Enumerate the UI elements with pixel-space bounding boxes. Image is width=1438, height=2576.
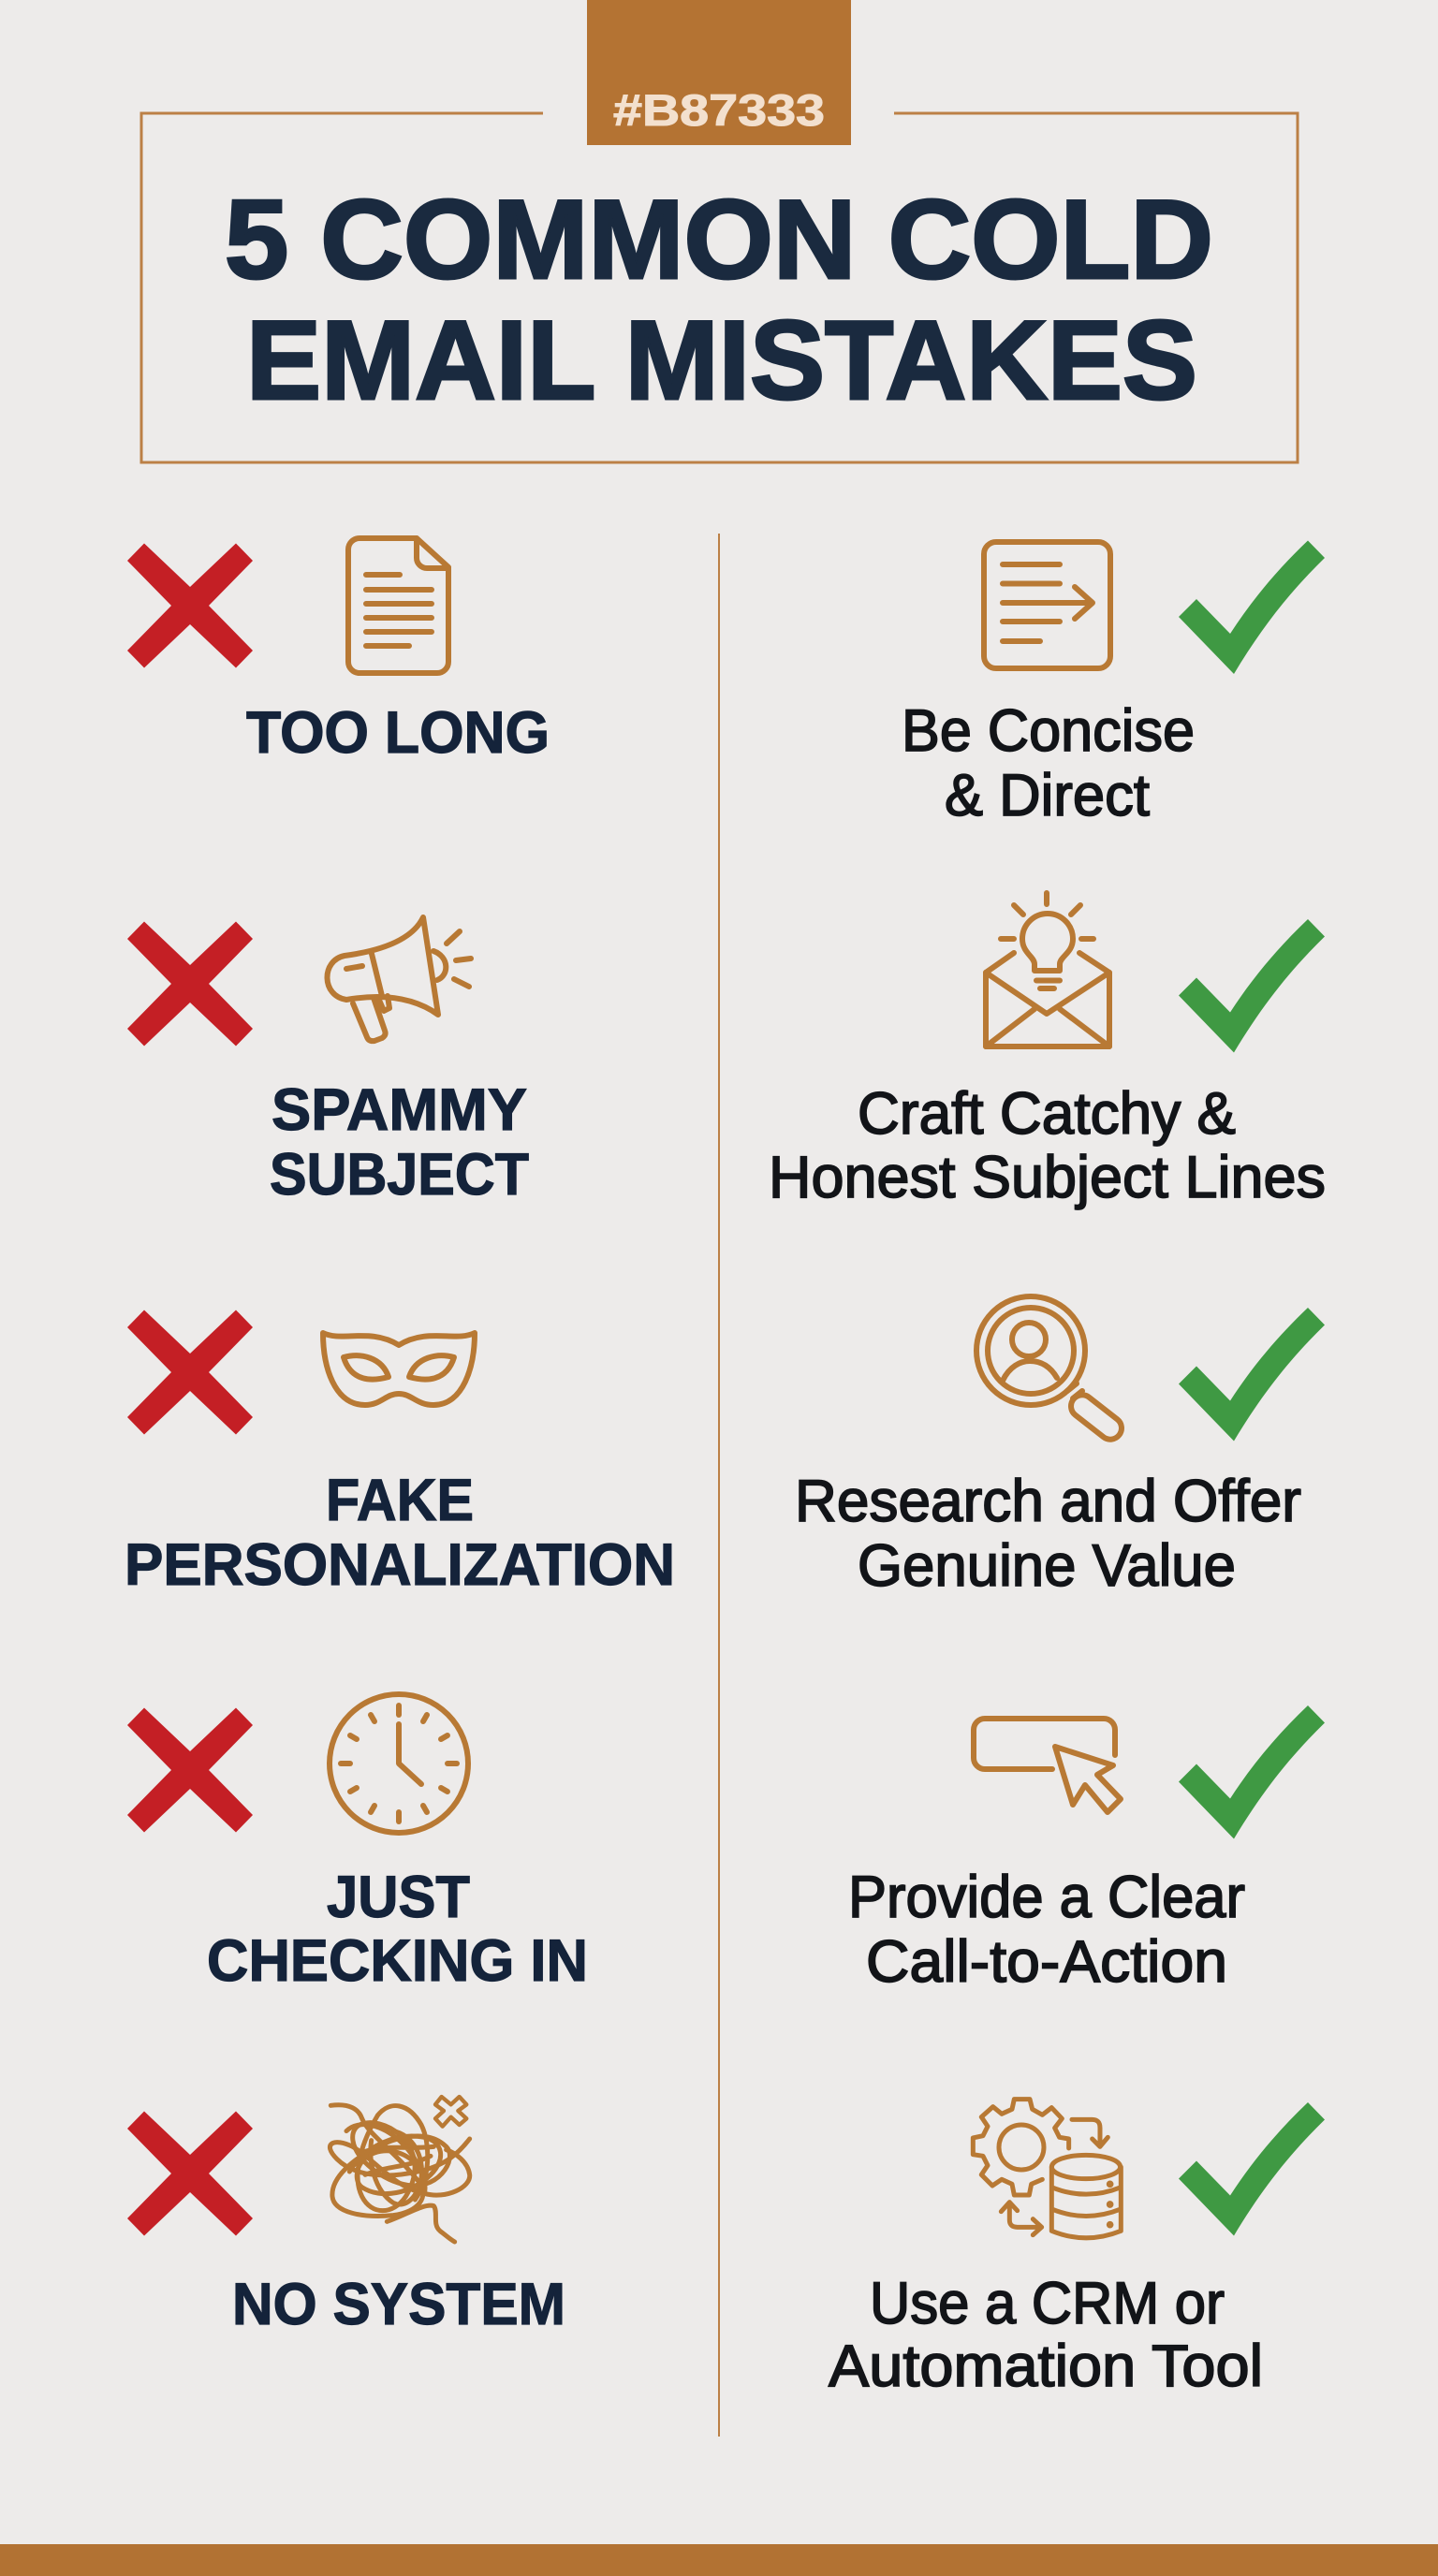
icon: green check <box>1179 541 1325 674</box>
label: Craft Catchy & <box>858 1081 1236 1147</box>
label: Call-to-Action <box>866 1929 1227 1995</box>
icon: mask <box>323 1333 475 1405</box>
label: TOO LONG <box>246 700 550 766</box>
label: JUST <box>327 1865 470 1930</box>
icon: green check <box>1179 919 1325 1052</box>
icon: gear and database <box>973 2100 1121 2238</box>
title <box>225 177 1213 423</box>
panel: fix be concise <box>902 541 1325 828</box>
label <box>769 1081 1326 1210</box>
label: & Direct <box>945 763 1150 828</box>
panel: mistake just checking in <box>127 1694 588 1994</box>
label: SPAMMY <box>271 1077 527 1143</box>
label: Genuine Value <box>858 1533 1236 1599</box>
label: SUBJECT <box>270 1142 529 1208</box>
icon: magnifier with person <box>976 1296 1126 1444</box>
label: Provide a Clear <box>848 1865 1245 1930</box>
icon: concise text with arrow <box>984 542 1110 668</box>
icon: green check <box>1179 1308 1325 1442</box>
icon: red cross <box>127 2112 253 2235</box>
label: FAKE <box>326 1468 474 1533</box>
label: Honest Subject Lines <box>769 1145 1326 1210</box>
label: Use a CRM or <box>870 2271 1225 2336</box>
label: PERSONALIZATION <box>125 1532 675 1598</box>
icon: red cross <box>127 1310 253 1434</box>
panel: fix research and offer value <box>795 1296 1325 1599</box>
panel: mistake no system <box>127 2097 565 2337</box>
title: EMAIL MISTAKES <box>246 298 1197 423</box>
panel: mistake spammy subject <box>127 917 529 1208</box>
footer bar <box>0 2544 1438 2576</box>
label <box>270 1077 529 1208</box>
icon: red cross <box>127 543 253 668</box>
icon: green check <box>1179 1705 1325 1838</box>
title: 5 COMMON COLD <box>225 177 1213 302</box>
icon: document <box>348 538 448 673</box>
label <box>207 1865 588 1994</box>
color tag badge: #B87333 <box>613 85 825 135</box>
label <box>795 1469 1301 1599</box>
panel: fix crm or automation <box>829 2100 1325 2399</box>
panel: mistake too long <box>127 538 550 766</box>
label: Be Concise <box>902 698 1195 764</box>
icon: button with cursor <box>974 1719 1121 1812</box>
icon: red cross <box>127 921 253 1046</box>
label: CHECKING IN <box>207 1928 588 1994</box>
header: title frame <box>141 113 1298 462</box>
icon: clock <box>330 1694 468 1833</box>
center divider <box>718 534 720 2437</box>
panel: fix clear call to action <box>848 1705 1325 1995</box>
label <box>829 2271 1263 2399</box>
icon: tangled line <box>330 2097 470 2242</box>
label: NO SYSTEM <box>232 2272 565 2337</box>
panel: fix catchy subject lines <box>769 893 1326 1210</box>
panel: mistake fake personalization <box>125 1310 675 1598</box>
icon: envelope with lightbulb <box>986 893 1109 1046</box>
label <box>902 698 1195 828</box>
label <box>125 1468 675 1598</box>
icon: red cross <box>127 1707 253 1833</box>
color tag badge <box>587 0 851 145</box>
label: Research and Offer <box>795 1469 1301 1534</box>
icon: green check <box>1179 2102 1325 2235</box>
icon: megaphone <box>327 917 471 1041</box>
label <box>848 1865 1245 1995</box>
label: Automation Tool <box>829 2334 1263 2399</box>
